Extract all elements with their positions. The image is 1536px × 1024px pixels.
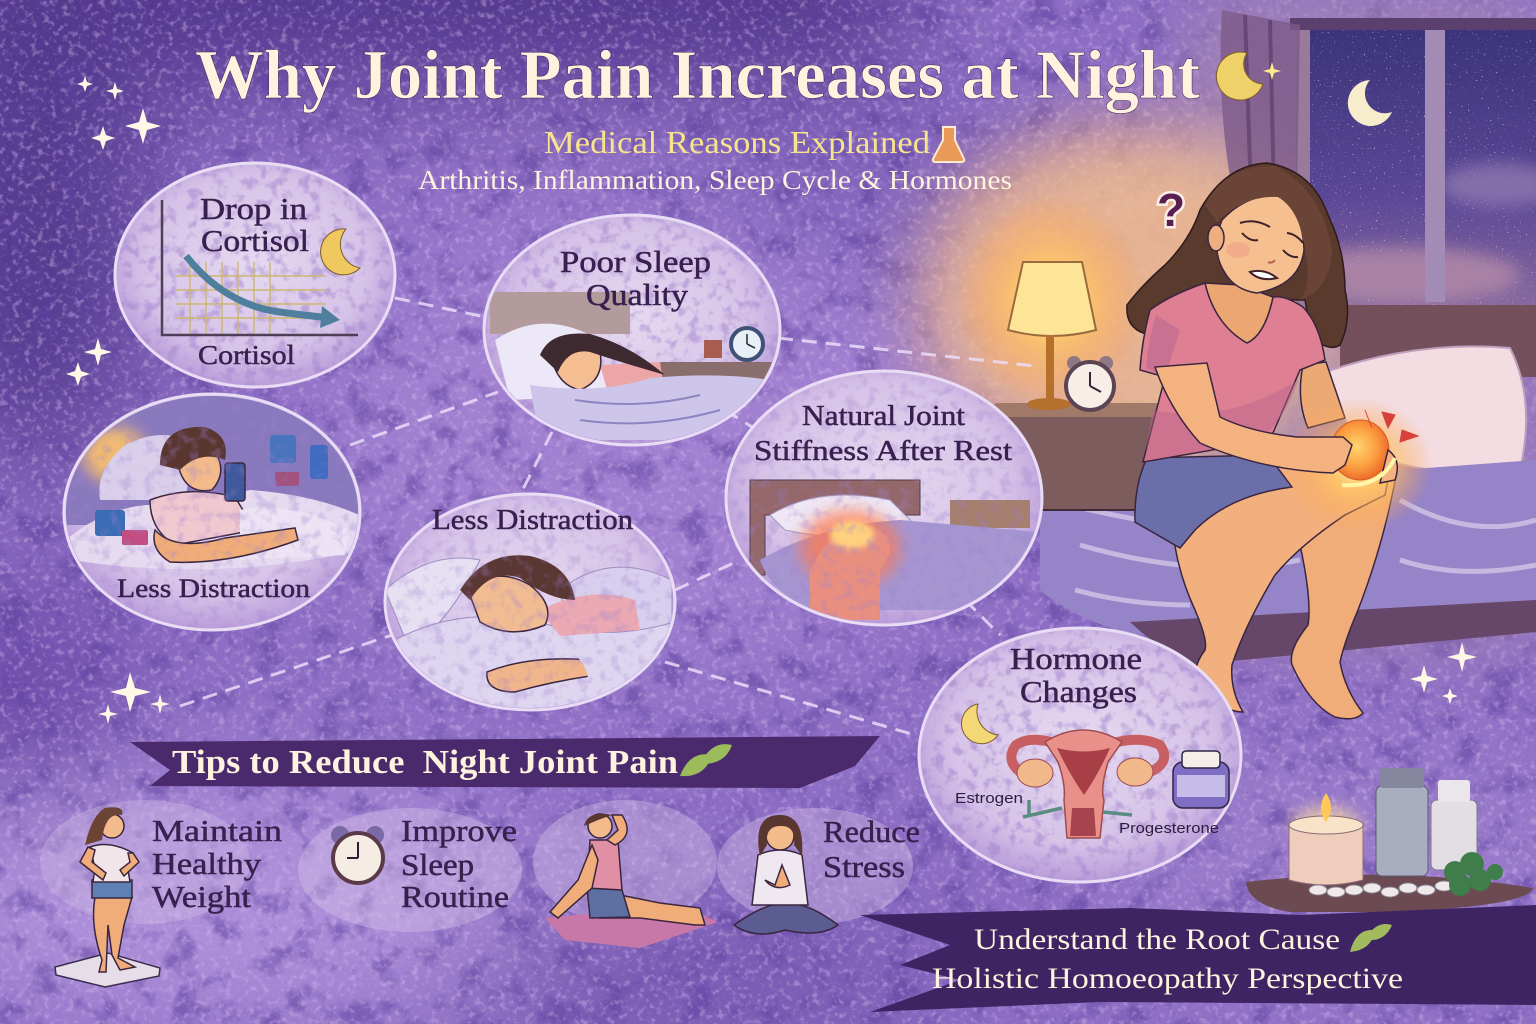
main illustration: woman with knee pain xyxy=(1127,163,1433,719)
heading line two: Quality xyxy=(586,277,689,312)
left leg and thigh xyxy=(1172,445,1390,712)
icon: crescent moon and stars xyxy=(1216,52,1281,100)
bedroom background xyxy=(920,0,1536,665)
scale xyxy=(55,953,160,987)
label: Less Distraction xyxy=(117,574,310,603)
warm lamp glow xyxy=(920,125,1340,475)
night table with lamp and alarm clock xyxy=(957,195,1160,510)
subtitle: Medical Reasons Explained xyxy=(544,124,930,160)
text line two: Sleep xyxy=(401,847,474,882)
panel: drop in cortisol xyxy=(110,160,400,390)
text line three: Weight xyxy=(152,879,251,914)
alarm clock xyxy=(1066,356,1114,410)
title: Why Joint Pain Increases at Night xyxy=(195,37,1200,114)
green herbs xyxy=(1444,852,1503,896)
meditating figure xyxy=(734,815,838,934)
tips banner xyxy=(130,736,880,788)
face xyxy=(1217,195,1304,293)
heading line two: Cortisol xyxy=(201,223,309,258)
front hair xyxy=(1205,166,1332,300)
right arm xyxy=(1300,362,1345,428)
label progesterone: Progesterone xyxy=(1119,820,1219,837)
curtain xyxy=(1220,10,1300,250)
ear xyxy=(1208,225,1224,251)
footer line one: Understand the Root Cause xyxy=(974,923,1340,956)
question mark: ? xyxy=(1157,184,1185,236)
lamp xyxy=(1008,262,1096,336)
mattress xyxy=(1040,459,1536,640)
text: Reduce xyxy=(823,814,920,849)
tip: reduce stress xyxy=(717,808,920,934)
neck xyxy=(1205,283,1273,343)
text line two: Healthy xyxy=(152,846,262,881)
text line two: Stress xyxy=(823,849,905,884)
nightstand xyxy=(995,412,1160,510)
footer banner xyxy=(860,905,1536,1012)
icon: alarm clock xyxy=(331,826,384,883)
panel: less distraction phone xyxy=(60,394,370,630)
tip: stretching figure xyxy=(533,800,718,948)
tip: maintain healthy weight xyxy=(40,800,283,987)
sparkle stars xyxy=(66,76,1477,724)
footer line two: Holistic Homoeopathy Perspective xyxy=(932,962,1403,995)
chart label: Cortisol xyxy=(198,340,295,370)
pointer lines xyxy=(1023,800,1132,817)
heading line two: Stiffness After Rest xyxy=(754,435,1012,467)
heading line two: Changes xyxy=(1020,674,1137,709)
cortisol chart xyxy=(162,200,358,335)
pain marks xyxy=(1365,410,1418,442)
label estrogen: Estrogen xyxy=(955,790,1023,807)
icon: moon xyxy=(962,704,998,744)
pills xyxy=(1309,881,1453,897)
pillow xyxy=(1325,346,1526,473)
icon: moon xyxy=(321,229,360,275)
bottles xyxy=(1376,786,1428,876)
facial features xyxy=(1240,221,1303,279)
t-shirt xyxy=(1140,283,1325,462)
icon: leaves xyxy=(680,744,732,776)
icon: flask xyxy=(933,127,964,162)
icon: jar xyxy=(1173,751,1229,808)
scene: sleeping woman xyxy=(385,495,680,720)
heading: Less Distraction xyxy=(432,505,633,536)
tray xyxy=(1246,875,1533,912)
panel: less distraction sleeping xyxy=(385,494,680,720)
painful knee xyxy=(1331,420,1389,480)
tips heading: Tips to Reduce Night Joint Pain xyxy=(172,744,678,781)
candle xyxy=(1289,793,1363,885)
panel: poor sleep quality xyxy=(484,215,780,445)
heading: Drop in xyxy=(200,191,308,226)
scene: bed with glowing joint xyxy=(726,372,1042,626)
scene: person in bed with phone xyxy=(60,394,370,630)
tip: improve sleep routine xyxy=(298,808,522,932)
candle and remedies on tray xyxy=(1246,768,1533,912)
headboard xyxy=(1340,305,1536,377)
right leg xyxy=(1291,470,1397,719)
heading: Hormone xyxy=(1010,641,1142,676)
subheading: Arthritis, Inflammation, Sleep Cycle & Hormones xyxy=(418,165,1012,195)
uterus diagram xyxy=(1011,730,1164,838)
heading: Natural Joint xyxy=(802,400,965,432)
window xyxy=(1280,18,1536,312)
icon: leaves xyxy=(1350,924,1392,952)
connecting dashed lines xyxy=(180,298,1035,735)
text line three: Routine xyxy=(401,879,509,914)
heading: Poor Sleep xyxy=(560,244,711,279)
far hand xyxy=(1380,450,1397,483)
left arm and hand xyxy=(1155,363,1352,473)
scene: restless sleep xyxy=(490,292,780,440)
text: Maintain xyxy=(152,813,283,848)
figure xyxy=(80,807,139,972)
shorts xyxy=(1135,455,1292,548)
text: Improve xyxy=(401,813,517,848)
panel: hormone changes xyxy=(919,628,1242,882)
knee glow xyxy=(1283,397,1433,533)
panel: natural joint stiffness xyxy=(726,371,1042,626)
back hair xyxy=(1127,163,1348,347)
